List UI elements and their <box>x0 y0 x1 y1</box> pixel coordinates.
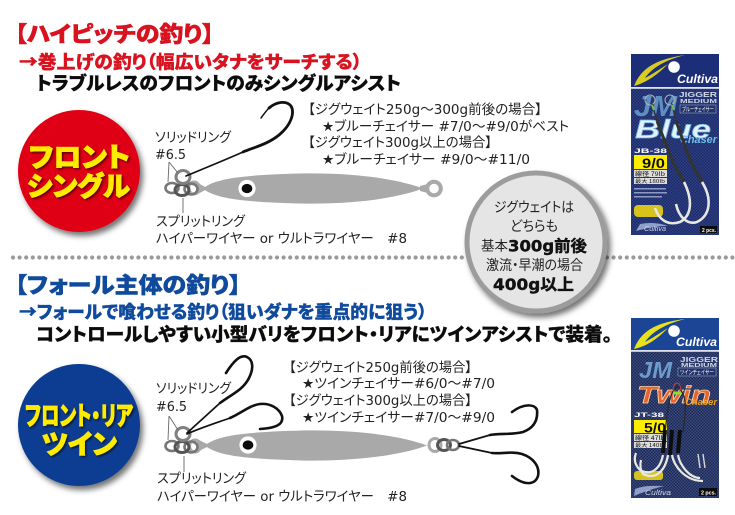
package: Blue Chaser: JIGGER <box>679 90 718 99</box>
rings front <box>166 428 200 452</box>
hook <box>186 102 292 176</box>
hooks <box>635 383 705 481</box>
package: Blue Chaser: 最大 180lb <box>635 178 665 185</box>
callout: jig weight: 300g前後 <box>508 236 587 256</box>
badge: front rear twin <box>18 364 140 486</box>
jig body <box>197 430 427 461</box>
label: solid ring 1 <box>155 126 231 163</box>
spec text: twin: ★ツインチェイサー#6/0〜#7/0 <box>302 376 495 392</box>
package: Blue Chaser: Blue <box>635 114 711 144</box>
rings <box>166 170 200 196</box>
spec text: front single: ★ブルーチェイサー #7/0〜#9/0がベスト <box>322 118 569 135</box>
logo swoosh <box>634 55 685 86</box>
package: Twin Chaser: 最大 140lb <box>635 442 665 449</box>
callout: jig weight: 激流・早潮の場合 <box>486 255 583 275</box>
spec text: twin: 【ジグウェイト250g前後の場合】 <box>289 359 472 376</box>
label: solid ring 2 <box>156 377 231 415</box>
package: Twin Chaser: 5/0 <box>644 420 666 436</box>
label: split ring 1 <box>156 210 407 247</box>
rear hooks <box>459 405 538 483</box>
package: Blue Chaser: Chaser <box>680 134 718 146</box>
jig body <box>196 173 441 204</box>
package: Blue Chaser <box>631 54 719 235</box>
spec text: twin: ★ツインチェイサー#7/0〜#9/0 <box>302 410 495 426</box>
callout: jig weight <box>467 173 605 311</box>
front hooks <box>187 356 282 434</box>
callout: jig weight: 400g以上 <box>493 275 574 294</box>
package: Twin Chaser: 線径 47lb <box>635 433 665 442</box>
label: solid ring 2: ソリッドリング <box>156 377 231 397</box>
package: Blue Chaser: 9/0 <box>642 155 665 171</box>
package: Twin Chaser <box>631 318 719 498</box>
badge: front single: フロント <box>29 136 130 175</box>
spec text: front single: 【ジグウェイト300g以上の場合】 <box>308 135 492 151</box>
package: Twin Chaser: Chaser <box>685 397 718 407</box>
subheading: high pitch: →巻上げの釣り（幅広いタナをサーチする） <box>19 48 362 74</box>
label: split ring 2: スプリットリング <box>157 467 246 487</box>
package: Twin Chaser: Cultiva <box>676 337 718 349</box>
package: Twin Chaser: 2 pcs. <box>701 490 716 496</box>
rings rear <box>429 438 459 452</box>
subheading: fall: →フォールで喰わせる釣り（狙いダナを重点的に狙う） <box>19 298 427 324</box>
spec text: front single: ★ブルーチェイサー #9/0〜#11/0 <box>322 151 530 168</box>
hooks <box>645 95 709 223</box>
badge: front single: シングル <box>27 165 130 204</box>
description: fall: コントロールしやすい小型バリをフロント・リアにツインアシストで装着。 <box>36 321 612 347</box>
package: Twin Chaser: JT-38 <box>634 412 665 419</box>
package: Blue Chaser: 線径 79lb <box>635 169 665 178</box>
label: split ring 1: ハイパーワイヤー or ウルトラワイヤー #8 <box>156 231 407 247</box>
logo swoosh <box>634 319 685 349</box>
diagram: front single rig <box>166 102 441 213</box>
label: split ring 2 <box>157 467 407 505</box>
callout: jig weight: ジグウェイトは <box>494 197 574 217</box>
package: Twin Chaser: JM <box>639 357 673 383</box>
dotted divider <box>13 255 735 260</box>
label: solid ring 1: #6.5 <box>155 147 186 163</box>
package: Twin Chaser: MEDIUM <box>681 363 718 369</box>
label: split ring 1: スプリットリング <box>156 210 245 230</box>
package: Blue Chaser: Cultiva <box>677 74 719 86</box>
heading: fall: 【フォール主体の釣り】 <box>15 268 241 300</box>
heading: high pitch: 【ハイピッチの釣り】 <box>15 17 214 49</box>
package: Blue Chaser: JM <box>634 91 678 123</box>
leader lines <box>168 416 184 472</box>
label: split ring 2: ハイパーワイヤー or ウルトラワイヤー #8 <box>157 489 407 505</box>
callout: jig weight: どちらも <box>510 216 558 236</box>
badge: front rear twin: ツイン <box>42 423 117 462</box>
leader lines <box>168 162 183 213</box>
callout: jig weight: 基本 <box>481 234 508 254</box>
description: high pitch: トラブルレスのフロントのみシングルアシスト <box>36 70 401 96</box>
label: solid ring 2: #6.5 <box>156 399 187 415</box>
package: Blue Chaser: MEDIUM <box>680 99 718 105</box>
label: solid ring 1: ソリッドリング <box>155 126 231 146</box>
package: Twin Chaser: JIGGER <box>680 355 719 364</box>
badge: front rear twin: フロント・リア <box>25 396 134 433</box>
badge: front single <box>18 110 140 232</box>
package: Blue Chaser: Cultiva <box>644 226 666 233</box>
spec text: front single <box>308 101 569 168</box>
diagram: front rear twin rig <box>166 356 538 483</box>
spec text: twin: 【ジグウェイト300g以上の場合】 <box>289 393 472 409</box>
package: Twin Chaser: Twin <box>637 382 711 409</box>
package: Blue Chaser: ブルーチェイサー <box>682 104 714 114</box>
package: Twin Chaser: ツインチェイサー <box>680 368 714 376</box>
package: Twin Chaser: Cultiva <box>645 488 671 497</box>
package: Blue Chaser: 2 pcs. <box>702 228 716 234</box>
spec text: twin <box>289 359 495 426</box>
spec text: front single: 【ジグウェイト250g〜300g前後の場合】 <box>308 101 542 118</box>
package: Blue Chaser: JB-38 <box>634 149 668 155</box>
